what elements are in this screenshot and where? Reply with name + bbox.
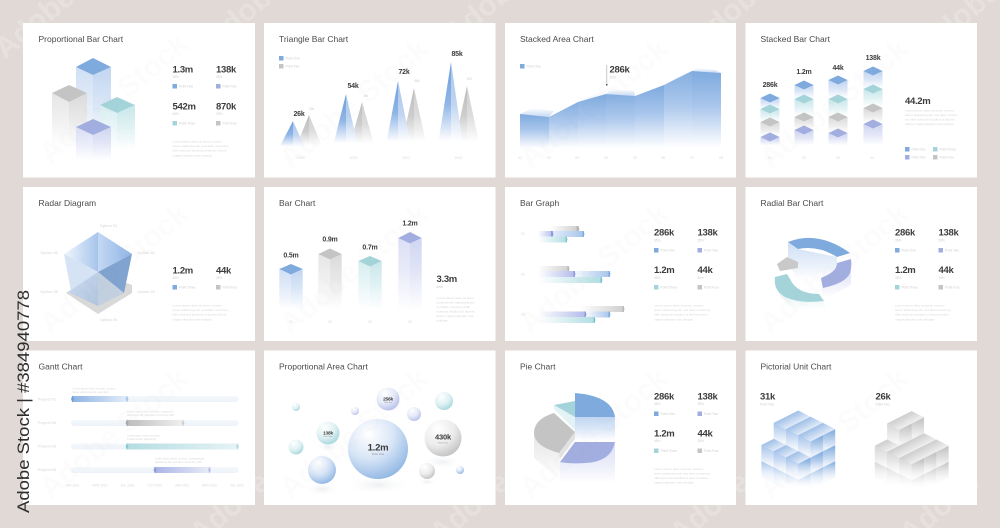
heading: Radial Bar Chart [760,198,824,208]
bubble labels: Point Three [323,435,333,438]
axis labels: 01 [289,320,293,324]
stat: 286k: 286k [654,392,675,402]
stat: 1.3m: 35% [172,75,179,79]
text block [654,304,711,321]
text block: Lorem ipsum dolor sit amet, consec- [172,304,222,308]
stat: 542m: Point Three [179,122,196,126]
axis labels: 02 [547,156,551,160]
gray slice [534,413,575,453]
bubble labels: Point Two [384,401,392,404]
stat: 31k: Point One [760,402,774,406]
stat: 138k: Point Two [222,84,237,88]
stat: 44k: Point Four [222,286,238,290]
stat: 138k [216,64,237,88]
stat: 286k: 35% [654,238,661,242]
value labels: 0.5m [283,252,299,260]
axis labels: 06 [661,156,665,160]
stat: 26k: Point Two [876,402,890,406]
axis labels: 04 [408,320,412,324]
gray arc [777,257,798,271]
teal arc [775,274,824,302]
time axis: OCT 2021 [147,484,163,488]
chart: bubbles [288,388,464,496]
panel: radial bar chart [746,187,977,341]
stat: 1.2m [895,265,918,290]
vertical stock id text: Adobe Stock | #384940778 [14,290,33,513]
stat: 1.3m: Point One [179,84,193,88]
stat: 138k: Point Two [704,412,718,416]
chart: area [520,68,721,149]
bubble labels: 430k [435,432,452,442]
text block: magna aliquam erat volutpat. [654,317,694,321]
stat: 138k: 138k [698,392,718,402]
stat: 1.2m [654,265,677,290]
value labels [293,51,473,118]
stat: 44k: 44k [216,266,232,276]
stat: 1.2m: Point Three [660,286,677,290]
stat: 31k [760,392,776,406]
stat: 286k: Point One [660,412,675,416]
legend [279,56,300,68]
radar axis labels: Option 06 [40,251,58,255]
stat: 286k: 35% [895,238,902,242]
gantt notes: consec-tetuer adipiscing [127,437,156,441]
value labels: 67k [467,77,473,81]
value labels: 66k [414,79,420,83]
heading: Radar Diagram [38,198,96,208]
text block: nibh euismod tincidunt ut laoreet dolore [172,313,227,317]
legend: Point One [912,148,926,152]
axis labels: 05 [633,156,637,160]
text block: tetuer adipiscing elit, sed diam nonummy [654,308,711,312]
stat: 542m: 45% [172,112,179,116]
axis labels: 01 [518,156,522,160]
blue arc [788,238,850,257]
text block: tetuer adipiscing elit, sed diam nonummy [172,308,229,312]
stat: 44k: 44k [698,428,713,440]
gantt notes: Lorem ipsum dolor sit amet, consec-tet [127,410,174,414]
value labels: 44k [832,65,844,72]
heading: Pictorial Unit Chart [760,362,832,372]
project labels: Project 04 [38,468,57,472]
stat: 44k: Point Four [704,449,720,453]
value labels: 39k [363,94,369,98]
stat: 286k: 35% [654,402,661,406]
panel: pictorial unit chart [746,350,977,505]
axis labels: 08 [719,156,723,160]
gantt notes: tetuer adipiscing elit, sed diam [72,390,109,394]
axis labels: 04 [870,156,874,160]
chart: 3d columns [279,232,422,314]
radar axis labels: Option 05 [40,290,58,294]
panel: stacked area chart [505,23,736,178]
value labels [763,55,881,89]
total and description: tetuer adipiscing elit, sed diam nonum- [905,113,958,117]
legend: Point Four [940,156,955,160]
callout: 286k [606,64,630,86]
stat: 286k: 286k [654,228,675,238]
stat: 138k: Point Two [704,248,718,252]
text block: tetuer adipiscing elit, sed diam nonummy [172,144,229,148]
panel: pie chart [505,350,736,505]
text block: magna aliquam erat volutpat. [895,317,935,321]
stat: 286k [654,392,675,416]
gantt notes: adipiscing elit, sed diam nonummy nibh [127,413,174,417]
total and description: euismod tincidunt ut laoreet [436,310,474,314]
stat: 44k: Point Four [945,286,961,290]
text block [895,304,952,321]
total and description: dolore magna aliquam erat volutpat. [905,122,954,126]
stat: 44k: 25% [938,276,945,280]
stat: 44k [216,266,238,290]
chart: blue cube stack [755,410,835,498]
stat: 1.2m: 1.2m [654,265,674,276]
legend: Point One [526,64,541,68]
total and description: total [436,285,443,289]
heading: Pie Chart [520,362,556,372]
axis labels: 03 [836,156,840,160]
group labels [521,232,525,316]
axis labels [296,156,462,160]
text block: nibh euismod tincidunt ut laoreet dolore [172,149,227,153]
time axis: JUL 2021 [120,484,135,488]
group labels: 02 [521,272,525,276]
stat: 138k: 138k [216,64,237,76]
chart: stacked columns [760,66,882,146]
time axis: JAN 2022 [175,484,189,488]
bubble labels: Point Four [438,442,448,444]
legend: Point Three [940,148,956,152]
stat: 1.2m: 45% [172,276,179,280]
stat: 138k: 138k [698,228,718,238]
axis labels: 03 [368,320,372,324]
value labels: 0.7m [362,244,378,252]
stat: 1.2m [654,428,677,453]
total and description [905,96,958,126]
text block: nibh euismod tincidunt ut laoreet dolore [895,313,949,317]
axis labels: 2020 [350,156,358,160]
stat: 26k [876,392,891,406]
stat: 138k: 35% [938,238,945,242]
blue slice [575,393,615,417]
stat: 1.2m: 45% [895,276,902,280]
project labels: Project 01 [38,398,56,402]
chart: gantt tracks [71,396,239,474]
radar axis labels [40,224,155,322]
stat: 1.2m: 45% [654,276,661,280]
total and description: 3.3m [436,274,457,285]
axis labels [289,320,412,324]
text block: Lorem ipsum dolor sit amet, consec- [654,304,704,308]
stat: 286k: 286k [895,228,916,238]
stat: 1.2m: Point Three [902,286,918,290]
axis labels: 2022 [454,156,462,160]
bubble labels [323,396,452,456]
total and description: dolore magna aliquam erat [436,314,473,318]
stat: 1.2m: 1.2m [172,266,193,276]
time axis: JAN 2021 [65,484,80,488]
stat: 138k: Point Two [945,248,959,252]
stat: 870k [216,102,238,126]
stat: 870k: Point Four [222,122,238,126]
total and description: 44.2m [905,96,930,107]
stat: 870k: 25% [216,112,223,116]
axis labels: 2019 [296,156,304,160]
stat: 138k: 138k [938,228,959,238]
total and description [436,274,475,322]
value labels: 26k [293,111,305,118]
value labels: 286k [763,82,778,89]
bubble labels: 256k [383,396,393,402]
teal slice [554,401,575,417]
text block [172,304,229,321]
legend [905,147,956,160]
gantt notes [72,386,204,464]
heading: Bar Graph [520,198,559,208]
text block: Lorem ipsum dolor sit amet, consec- [895,304,945,308]
stat: 44k: 44k [698,265,713,276]
stat: 542m [172,102,196,126]
legend: Point Two [912,156,926,160]
stat: 1.2m: Point Three [660,449,677,453]
text block: Lorem ipsum dolor sit amet, consec- [654,467,704,471]
heading: Proportional Bar Chart [38,34,124,44]
stat: 44k: 44k [938,265,954,276]
chart: triangles [279,62,480,148]
stat: 1.2m: 1.2m [654,428,674,440]
heading: Stacked Area Chart [520,34,594,44]
stat: 286k: Point One [902,248,916,252]
value labels: 54k [347,83,359,90]
radar axis labels: Option 02 [137,251,155,255]
axis labels [518,156,723,160]
value labels: 25k [309,107,315,111]
legend: Point One [286,56,300,60]
value labels: 85k [451,51,463,58]
stat: 44k: 25% [216,276,223,280]
stat: 138k: 35% [698,238,704,242]
gantt notes: Lorem ipsum dolor sit amet, consec- [72,386,116,390]
value labels: 138k [866,55,881,62]
text block: magna aliquam erat volutpat. [172,153,213,157]
text block: nibh euismod tincidunt ut laoreet dolore [654,476,708,480]
heading: Stacked Bar Chart [760,34,831,44]
periwinkle arc [821,259,851,288]
total and description: consectetuer adipiscing elit, [436,300,475,304]
text block: tetuer adipiscing elit, sed diam nonummy [654,472,711,476]
stat: 286k: Point One [660,248,675,252]
panel: proportional bar chart [23,23,255,178]
value labels: 0.9m [322,236,338,244]
panel: bar graph [505,187,736,341]
stat: 44k [698,428,720,453]
chart: radial ring [775,238,851,312]
text block [654,467,711,484]
axis labels: 01 [768,156,772,160]
gantt notes: Lorem ipsum dolor sit amet, consectetuer [155,456,204,460]
heading: Triangle Bar Chart [279,34,349,44]
radar axis labels: Option 04 [100,318,118,322]
total and description: sed diam nonummy nibh [436,305,470,309]
stat: 138k [938,228,959,252]
stat: 870k: 870k [216,102,237,112]
axis labels: 02 [328,320,332,324]
chart: 3d pie [534,393,615,485]
callout: 286k: 35% [610,76,616,80]
bubble labels: 1.2m [368,442,388,454]
text block: nibh euismod tincidunt ut laoreet dolore [654,313,708,317]
stat: 286k [895,228,916,252]
stat: 1.3m: 1.3m [172,64,193,76]
axis labels: 07 [690,156,694,160]
axis labels: 2021 [402,156,410,160]
bubble labels: Point One [372,452,385,456]
stat: 44k: Point Four [704,286,720,290]
total and description: my nibh euismod tincidunt ut laoreet [905,118,955,122]
stat: 44k [938,265,961,290]
total and description: Lorem ipsum dolor sit amet, [436,296,475,300]
stat: 26k: 26k [876,392,891,402]
project labels: Project 03 [38,444,56,448]
axis labels: 02 [802,156,806,160]
panel: gantt chart [23,350,255,505]
stat: 1.2m [172,266,196,290]
legend [520,64,541,68]
panel: stacked bar chart [746,23,977,178]
chart: horizontal bars [538,226,624,323]
heading: Proportional Area Chart [279,362,368,372]
text block: tetuer adipiscing elit, sed diam nonummy [895,308,952,312]
stat: 138k [698,392,718,416]
stat: 31k: 31k [760,392,776,402]
value labels [283,220,418,260]
chart: isometric bars [52,58,135,162]
time axis [65,484,244,488]
callout: 286k: 286k [610,64,630,76]
panel: triangle bar chart [264,23,496,178]
total and description: Lorem ipsum dolor sit amet, consec- [905,108,955,112]
total and description: volutpat. [436,318,448,322]
radar axis labels: Option 01 [100,224,117,228]
stat: 138k [698,228,718,252]
heading: Bar Chart [279,198,316,208]
stat: 44k [698,265,720,290]
panel: bar chart [264,187,496,341]
stat: 1.3m [172,64,193,88]
gantt notes: Lorem ipsum dolor sit amet, [127,434,160,438]
stat: 542m: 542m [172,102,196,112]
stat: 44k: 25% [698,439,704,443]
value labels: 72k [398,69,410,76]
text block: magna aliquam erat volutpat. [654,480,694,484]
axis labels: 03 [575,156,579,160]
time axis: APR 2022 [202,484,217,488]
group labels: 03 [521,312,525,316]
chart: radar [64,232,132,314]
panel: radar diagram [23,187,255,341]
stat: 1.2m: Point Three [179,286,196,290]
time axis: APR 2021 [92,484,108,488]
gantt notes: adipiscing elit, sed diam nonummy nibh [155,460,202,464]
stat: 1.2m: 45% [654,439,661,443]
stat: 286k [654,228,675,252]
text block: magna aliquam erat volutpat. [172,317,213,321]
heading: Gantt Chart [38,362,83,372]
axis labels: 04 [604,156,608,160]
legend: Point Two [286,64,300,68]
watermark over panels [33,27,915,505]
chart: gray cube stack [870,411,952,498]
axis labels [768,156,874,160]
stat: 138k: 35% [216,75,223,79]
time axis: JUL 2022 [230,484,244,488]
panel: proportional area chart [264,350,496,505]
stat: 1.2m: 1.2m [895,265,915,276]
value labels: 1.2m [402,220,418,228]
radar axis labels: Option 03 [137,290,155,294]
project labels: Project 02 [38,421,56,425]
stat: 138k: 35% [698,402,704,406]
group labels: 01 [521,232,525,236]
bubble labels: 138k [323,430,333,436]
value labels: 1.2m [796,69,812,76]
periwinkle slice [560,442,615,463]
text block [172,140,229,157]
text block: Lorem ipsum dolor sit amet, consec- [172,140,222,144]
project labels [38,398,57,472]
stat: 44k: 25% [698,276,704,280]
